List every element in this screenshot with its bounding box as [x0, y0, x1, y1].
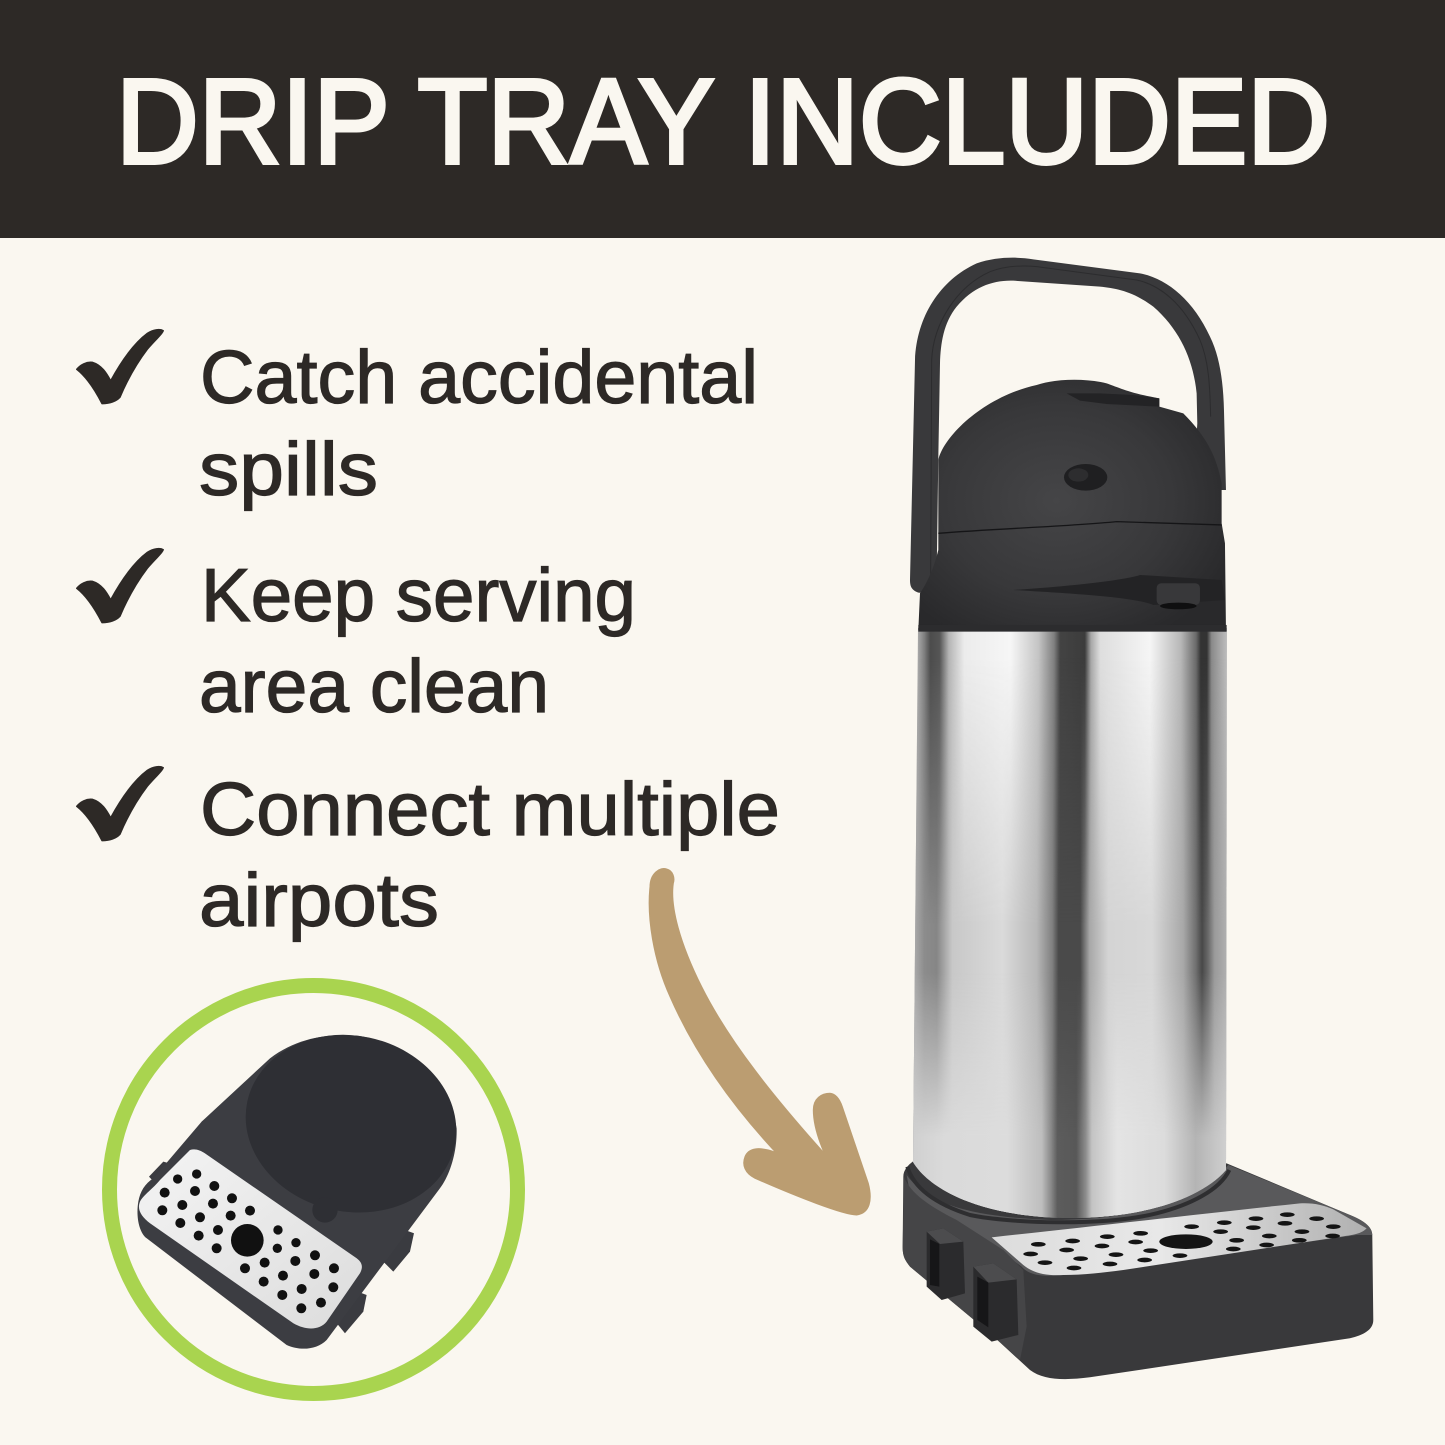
title: DRIP TRAY INCLUDED	[116, 53, 1330, 189]
recess shadow	[907, 1167, 1229, 1222]
connector clip left	[927, 1228, 965, 1300]
collar rim	[918, 625, 1227, 632]
header band	[0, 0, 1445, 238]
tray body	[137, 1035, 457, 1349]
lid and collar	[918, 380, 1227, 632]
steel plate	[992, 1203, 1367, 1275]
text: keep serving area clean: Keep serving	[201, 553, 636, 637]
connector clips	[149, 1108, 414, 1333]
text: catch accidental spills: spills	[199, 427, 378, 511]
text: connect multiple airpots: airpots	[199, 858, 439, 942]
plate holes	[157, 1169, 339, 1313]
drip tray top view	[137, 1016, 473, 1349]
stainless steel body	[905, 620, 1235, 1225]
text: catch accidental spills: Catch accidental	[200, 335, 758, 419]
text: keep serving area clean	[199, 553, 636, 728]
lid seam	[938, 522, 1222, 533]
steel plate	[139, 1149, 362, 1329]
benefit: catch accidental spills	[77, 330, 758, 511]
text: connect multiple airpots	[199, 767, 780, 942]
text: keep serving area clean: area clean	[199, 644, 549, 728]
tray shell	[903, 1162, 1373, 1379]
nozzle	[1157, 583, 1200, 609]
circular recess	[229, 1016, 473, 1232]
lid top cap	[1067, 393, 1159, 407]
text: connect multiple airpots: Connect multiple	[200, 767, 780, 851]
benefit: keep serving area clean	[77, 549, 636, 728]
handle	[910, 258, 1226, 593]
side button	[1064, 464, 1107, 491]
drip tray base	[903, 1162, 1373, 1379]
icon: check mark	[77, 767, 163, 841]
inset circle: drip tray close-up	[110, 986, 518, 1394]
icon: check mark	[77, 330, 163, 404]
tray top face	[907, 1165, 1372, 1276]
arrow	[649, 869, 870, 1215]
icon: check mark	[77, 549, 163, 623]
product: airpot on drip tray	[903, 258, 1373, 1379]
plate holes	[1023, 1212, 1341, 1270]
tray side face	[903, 1177, 1027, 1360]
benefit: connect multiple airpots	[77, 767, 780, 942]
spout shadow	[1013, 575, 1225, 605]
connector clip right	[973, 1263, 1018, 1342]
text: catch accidental spills	[199, 335, 758, 511]
